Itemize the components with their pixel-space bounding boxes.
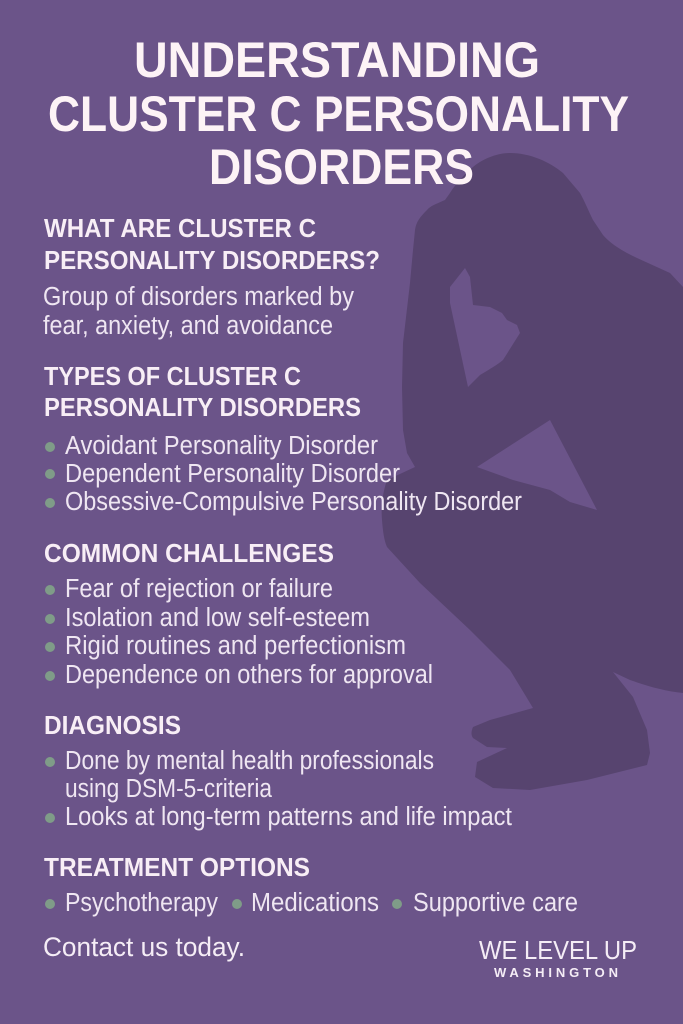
logo: We Level Up Washington (479, 935, 637, 980)
call to action: Contact us today. (43, 932, 245, 962)
list: treatments (45, 889, 578, 917)
section: diagnosis (44, 710, 512, 831)
definition text: fear, anxiety, and avoidance (43, 312, 333, 340)
list: types: Dependent Personality Disorder (65, 460, 400, 488)
list: types: Obsessive-Compulsive Personality Disorder (65, 488, 522, 516)
heading: types: TYPES OF CLUSTER C (44, 361, 301, 391)
heading: diagnosis: DIAGNOSIS (44, 710, 181, 740)
heading: what are: WHAT ARE CLUSTER C (44, 213, 316, 243)
list: challenges: Rigid routines and perfectionism (65, 632, 406, 660)
definition text (43, 283, 354, 340)
heading: what are (44, 213, 380, 275)
section: common challenges (44, 538, 433, 689)
list: challenges: Dependence on others for approval (65, 661, 433, 689)
heading: what are: PERSONALITY DISORDERS? (44, 245, 380, 275)
list: diagnosis (45, 747, 512, 831)
title: UNDERSTANDING (134, 32, 540, 88)
heading: types: PERSONALITY DISORDERS (44, 392, 361, 422)
heading: types (44, 361, 361, 422)
list: challenges (45, 575, 433, 689)
list: treatments: Psychotherapy (65, 889, 218, 917)
section: treatment options (44, 852, 578, 917)
section: types (44, 361, 522, 516)
section: what are cluster C personality disorders (43, 213, 380, 340)
silhouette: person sitting with head in hands (382, 153, 683, 790)
list: types (45, 432, 522, 516)
heading: treatment options: TREATMENT OPTIONS (44, 852, 310, 882)
list: treatments: Supportive care (413, 889, 578, 917)
title: DISORDERS (209, 139, 474, 195)
list: treatments: Medications (251, 889, 379, 917)
title (48, 32, 629, 195)
logo: We Level Up Washington: WASHINGTON (494, 965, 618, 980)
heading: common challenges: COMMON CHALLENGES (44, 538, 334, 568)
list: diagnosis: Done by mental health professionals (65, 747, 434, 775)
definition text: Group of disorders marked by (43, 283, 354, 311)
list: challenges: Fear of rejection or failure (65, 575, 333, 603)
list: challenges: Isolation and low self-esteem (65, 604, 370, 632)
list: diagnosis: using DSM-5-criteria (65, 775, 273, 803)
logo: We Level Up Washington: WE LEVEL UP (479, 935, 637, 965)
list: diagnosis: Looks at long-term patterns and life impact (65, 803, 512, 831)
list: types: Avoidant Personality Disorder (65, 432, 378, 460)
